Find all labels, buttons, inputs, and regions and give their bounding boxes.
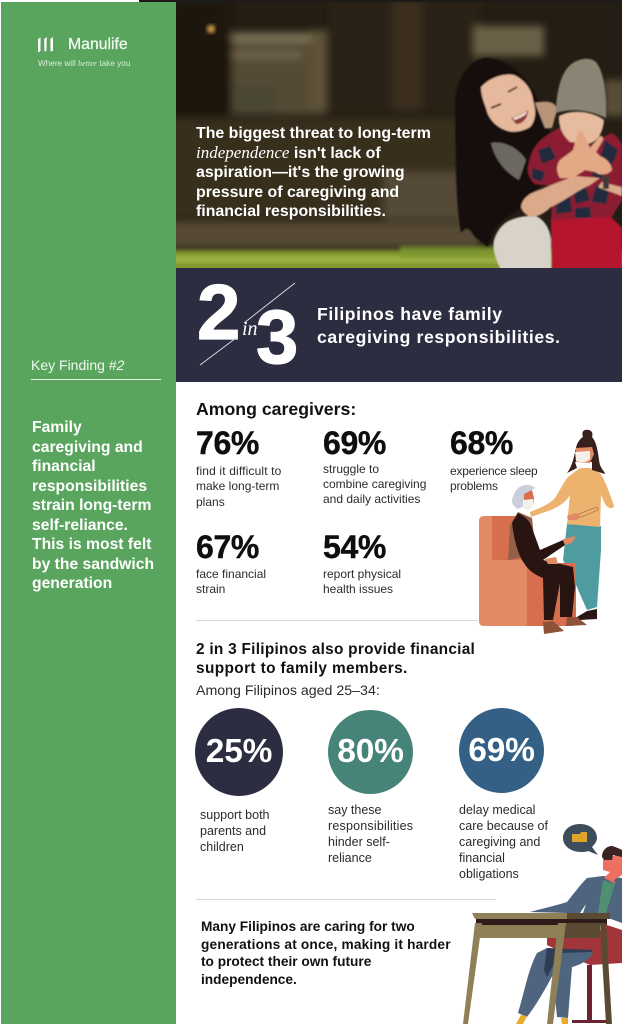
caption: 69%: caregiving and bbox=[459, 834, 540, 848]
caregiver trousers bbox=[563, 524, 601, 610]
label: key finding: Key Finding #2 bbox=[31, 357, 124, 373]
elder vest bbox=[508, 512, 536, 560]
panel: 2 in 3 banner bbox=[176, 268, 622, 382]
caption: experience sleep bbox=[450, 464, 538, 478]
mask bbox=[575, 451, 590, 462]
hero statement: financial responsibilities. bbox=[196, 203, 386, 220]
divider under key finding bbox=[31, 379, 161, 380]
caption: 80%: reliance bbox=[328, 851, 372, 865]
brand name: Manulife bbox=[68, 36, 128, 53]
hero statement: The biggest threat to long-term bbox=[196, 125, 431, 142]
hero statement: pressure of caregiving and bbox=[196, 184, 399, 201]
number: 54% bbox=[323, 529, 386, 565]
caption: 69%: care because of bbox=[459, 818, 548, 832]
subheading: Among Filipinos aged 25–34: bbox=[196, 683, 380, 699]
child face bbox=[559, 112, 604, 144]
banner text: caregiving responsibilities. bbox=[317, 326, 561, 346]
caption: struggle to bbox=[323, 462, 379, 476]
desk bbox=[472, 913, 610, 919]
key finding text bbox=[32, 419, 154, 592]
child shirt bbox=[528, 127, 622, 220]
divider bbox=[196, 620, 478, 621]
closing statement: independence. bbox=[201, 972, 297, 987]
closing statement: to protect their own future bbox=[201, 954, 371, 969]
heading: financial support: support to family members. bbox=[196, 660, 408, 677]
stat circle: 80%: 80% bbox=[337, 733, 404, 770]
caption: combine caregiving bbox=[323, 477, 426, 491]
caregiver face bbox=[576, 447, 594, 463]
caption: 80%: responsibilities bbox=[328, 819, 413, 833]
tagline: Where will better take you bbox=[38, 59, 130, 68]
grass bbox=[170, 250, 622, 276]
child hat bbox=[556, 59, 606, 118]
heading: among caregivers: Among caregivers: bbox=[196, 399, 356, 419]
key finding text: Family bbox=[32, 419, 82, 436]
key finding text: by the sandwich bbox=[32, 556, 154, 572]
caption: 25%: parents and bbox=[200, 824, 266, 838]
caption bbox=[450, 464, 538, 493]
caption bbox=[196, 567, 266, 596]
panel: hero photo bbox=[176, 2, 622, 268]
number: 67% bbox=[196, 529, 259, 565]
stat: 54% bbox=[323, 529, 401, 596]
shoes bbox=[516, 1015, 568, 1024]
speech bubble bbox=[563, 824, 598, 855]
key finding text: generation bbox=[32, 575, 112, 592]
stat: 76% bbox=[196, 425, 282, 509]
closing statement: Many Filipinos are caring for two bbox=[201, 919, 415, 934]
key finding text: caregiving and bbox=[32, 438, 143, 456]
divider bbox=[196, 899, 496, 900]
caption: report physical bbox=[323, 567, 401, 581]
caption: 69%: obligations bbox=[459, 866, 519, 880]
caption: strain bbox=[196, 582, 225, 596]
caption: and daily activities bbox=[323, 492, 420, 506]
big numeral 2: 2 bbox=[197, 268, 240, 356]
shirt bbox=[598, 880, 615, 913]
key finding text: self-reliance. bbox=[32, 516, 128, 534]
banner text bbox=[317, 304, 561, 346]
key finding text: This is most felt bbox=[32, 536, 151, 553]
caption: make long-term bbox=[196, 479, 279, 493]
caregiver sweater and arms bbox=[530, 468, 614, 527]
eyes bbox=[491, 87, 517, 108]
caregiver shoe bbox=[577, 609, 597, 620]
closing statement bbox=[201, 919, 451, 987]
child hands bbox=[557, 131, 612, 178]
number: 69% bbox=[323, 425, 386, 461]
caption bbox=[323, 567, 401, 596]
stat circle: 25%: 25% bbox=[206, 733, 272, 770]
number: 76% bbox=[196, 425, 259, 461]
caption bbox=[196, 464, 282, 509]
caption: 25%: support both bbox=[200, 808, 270, 822]
stat circle: 69%: 69% bbox=[468, 732, 535, 769]
bracelet bbox=[603, 176, 609, 189]
in: in bbox=[242, 318, 258, 340]
hero statement: aspiration—it's the growing bbox=[196, 164, 405, 181]
icon: man at desk illustration bbox=[463, 824, 622, 1024]
stat circle: 80% bbox=[328, 710, 413, 794]
caption: plans bbox=[196, 495, 225, 509]
hero statement bbox=[196, 125, 431, 220]
chair bbox=[547, 925, 622, 965]
heading: financial support: 2 in 3 Filipinos also provide financial bbox=[196, 641, 475, 658]
mouth bbox=[511, 110, 528, 124]
closing statement: generations at once, making it harder bbox=[201, 937, 451, 952]
caption: 80% bbox=[328, 803, 413, 865]
key finding text: strain long-term bbox=[32, 497, 151, 514]
stat circle: 69% bbox=[459, 708, 544, 793]
caption: face financial bbox=[196, 567, 266, 581]
trousers bbox=[518, 948, 575, 1017]
stat: 67% bbox=[196, 529, 266, 596]
caption: 69%: delay medical bbox=[459, 802, 535, 816]
caption: 69% bbox=[459, 802, 548, 880]
armchair bbox=[479, 516, 576, 626]
gray top bbox=[491, 142, 526, 180]
caption: health issues bbox=[323, 582, 393, 596]
fraction slash bbox=[200, 282, 296, 366]
heading: financial support bbox=[196, 641, 475, 677]
top strip bbox=[139, 0, 622, 2]
banner text: Filipinos have family bbox=[317, 304, 503, 324]
icon: Manulife logo bbox=[38, 37, 53, 52]
stat: 68% bbox=[450, 425, 538, 493]
hero statement: independence isn't lack of bbox=[196, 143, 381, 162]
panel: green sidebar bbox=[1, 2, 176, 1024]
hair bbox=[455, 58, 551, 247]
caption: 25%: children bbox=[200, 840, 244, 854]
elder hands bbox=[545, 536, 576, 564]
number: 68% bbox=[450, 425, 513, 461]
stat: 69% bbox=[323, 425, 426, 506]
key finding text: financial bbox=[32, 458, 96, 475]
elder shoes bbox=[543, 617, 587, 634]
trousers knee bbox=[493, 216, 551, 270]
elder clothes bbox=[512, 513, 575, 620]
caption: problems bbox=[450, 479, 498, 493]
caregiver hair bbox=[567, 430, 605, 474]
elder hair bbox=[512, 485, 535, 509]
hair bbox=[602, 846, 622, 860]
photo illustration: mother and child bbox=[176, 2, 622, 268]
stat circle: 25% bbox=[195, 708, 283, 796]
elder face and mask bbox=[524, 490, 534, 510]
shoulder behind child bbox=[535, 102, 557, 128]
caption: 69%: financial bbox=[459, 850, 505, 864]
big numeral 3: 3 bbox=[256, 295, 298, 380]
jacket bbox=[530, 876, 622, 923]
head bbox=[603, 853, 622, 884]
key finding text: responsibilities bbox=[32, 478, 147, 494]
child red trousers bbox=[551, 217, 622, 270]
woman's arm bbox=[521, 176, 600, 217]
folder bbox=[572, 832, 587, 842]
caption bbox=[323, 462, 426, 506]
caption: find it difficult to bbox=[196, 464, 282, 478]
caption: 80%: say these bbox=[328, 803, 382, 817]
caption: 25% bbox=[200, 808, 270, 854]
caption: 80%: hinder self- bbox=[328, 835, 390, 849]
icon: caregiver and elderly person illustration bbox=[479, 430, 614, 634]
face bbox=[481, 74, 535, 132]
